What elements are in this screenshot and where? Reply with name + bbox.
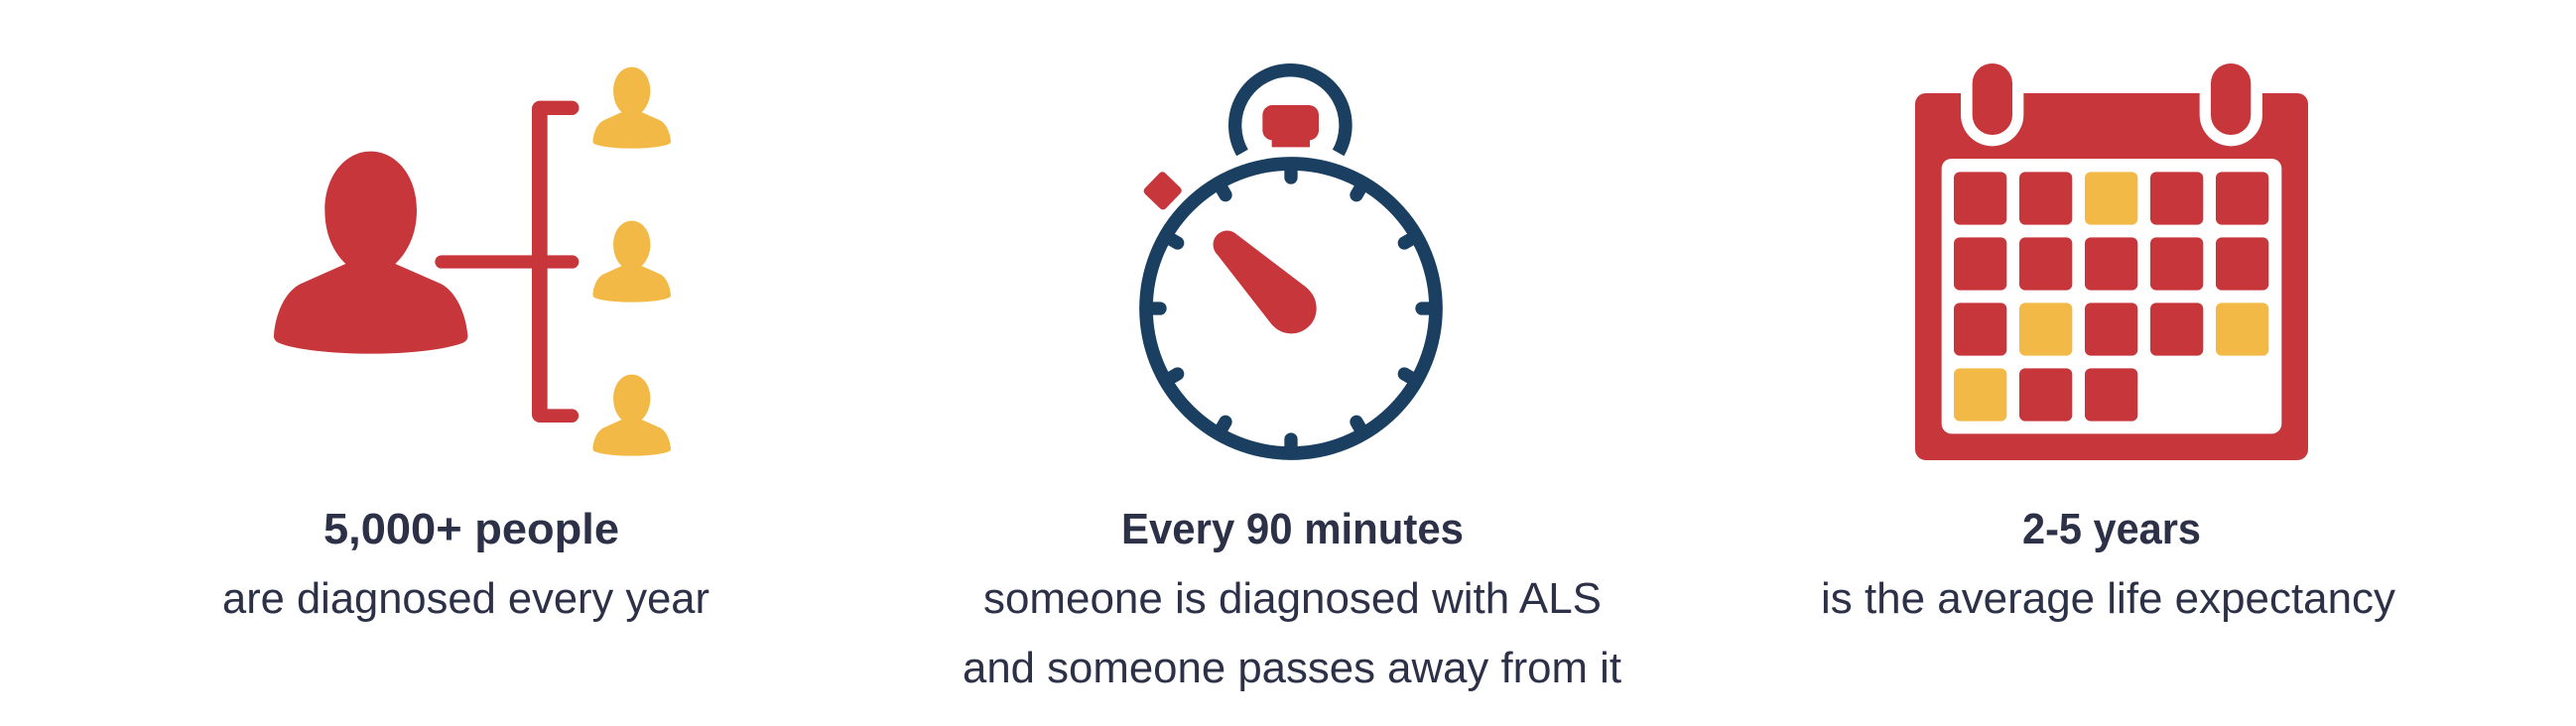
icon: people network: [274, 67, 671, 456]
calendar page: [1942, 159, 2281, 433]
calendar rings: [1973, 63, 2251, 135]
calendar body: [1915, 93, 2308, 460]
text: is the average life expectancy: is the average life expectancy: [1821, 574, 2395, 623]
heading: Every 90 minutes: Every 90 minutes: [1121, 505, 1464, 553]
text: someone is diagnosed with ALS: someone is diagnosed with ALS: [983, 574, 1602, 623]
text: and someone passes away from it: and someone passes away from it: [963, 644, 1621, 692]
heading: 2-5 years: 2-5 years: [2022, 505, 2201, 553]
icon: stopwatch: [1142, 70, 1436, 453]
infographic: [224, 63, 2395, 691]
stopwatch top ring: [1235, 70, 1346, 153]
icon: small yellow people: [592, 67, 671, 456]
calendar ring cutouts: [1961, 89, 2262, 146]
stopwatch ticks: [1146, 164, 1436, 453]
icon: large red person: [274, 152, 467, 354]
panel: life expectancy: [1821, 63, 2395, 623]
stopwatch dial: [1146, 164, 1436, 453]
stopwatch top button: [1262, 105, 1319, 147]
icon: calendar: [1915, 63, 2308, 460]
stopwatch side button: [1142, 171, 1183, 211]
text: are diagnosed every year: are diagnosed every year: [222, 574, 709, 623]
heading: 5,000+ people: 5,000+ people: [323, 505, 619, 553]
panel: every 90 minutes: [963, 70, 1621, 692]
calendar day cells: [1954, 172, 2268, 422]
stopwatch hand: [1214, 231, 1317, 333]
panel: people diagnosed: [222, 67, 709, 623]
connector bracket: [435, 101, 579, 423]
